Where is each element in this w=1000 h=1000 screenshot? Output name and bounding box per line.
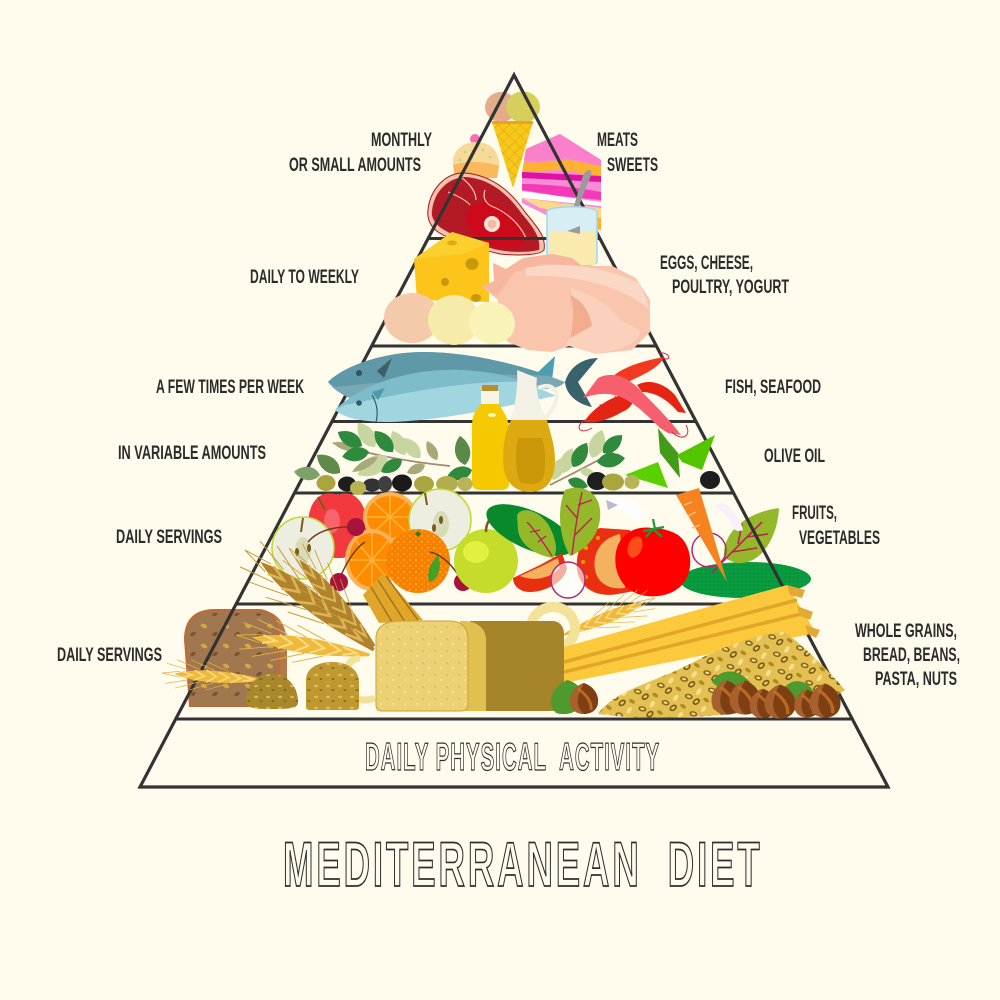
icon: orange slice upper — [363, 492, 417, 542]
icon: chard leaves — [517, 488, 600, 558]
label: in variable amounts: IN VARIABLE AMOUNTS — [118, 443, 266, 464]
label: daily to weekly: DAILY TO WEEKLY — [250, 267, 359, 288]
icon: red apple — [308, 493, 367, 558]
pyramid base text: daily physical activity: DAILY PHYSICAL ACTIVITY — [365, 735, 659, 779]
icon: cake slice — [522, 134, 601, 230]
label: poultry yogurt: POULTRY, YOGURT — [672, 277, 789, 298]
icon: bagel rings — [345, 607, 575, 700]
icon: olive oil jug — [503, 370, 556, 492]
icon: halved apple right — [409, 489, 471, 551]
icon: dry spaghetti bundle — [363, 573, 423, 623]
icon: grain pile — [598, 632, 845, 718]
icon: onion rings — [551, 533, 726, 598]
icon: halved apple left — [272, 517, 334, 579]
food in front of the pyramid lines — [161, 170, 845, 719]
icon: cucumber and chard on the right — [679, 508, 811, 598]
icon: dark cucumber — [479, 494, 581, 566]
icon: cut of red meat — [428, 173, 544, 255]
icon: raw chicken — [482, 254, 650, 354]
icon: ice cream — [485, 92, 540, 188]
icon: tomato wedge — [513, 553, 567, 592]
icon: cherries — [308, 518, 472, 591]
icon: eggs — [384, 293, 519, 348]
label: eggs cheese: EGGS, CHEESE, — [660, 253, 753, 274]
label: olive oil: OLIVE OIL — [764, 446, 825, 467]
label: daily servings grains: DAILY SERVINGS — [57, 645, 162, 666]
icon: tomato slice large — [577, 528, 640, 595]
icon: green apple — [454, 519, 518, 593]
label: monthly: MONTHLY — [371, 130, 432, 151]
icon: red tomato — [615, 519, 690, 596]
label: pasta nuts: PASTA, NUTS — [875, 669, 957, 690]
icon: orange slice lower — [345, 529, 399, 591]
icon: carrot — [676, 488, 727, 582]
icon: cupcake — [453, 134, 499, 178]
label: or small amounts: OR SMALL AMOUNTS — [289, 155, 421, 176]
label: vegetables: VEGETABLES — [799, 528, 880, 549]
title: MEDITERRANEAN DIET — [283, 829, 760, 899]
icon: upper fish — [328, 352, 598, 407]
icon: olives row — [316, 471, 720, 495]
label: sweets: SWEETS — [607, 155, 658, 176]
label: fish seafood: FISH, SEAFOOD — [725, 377, 821, 398]
icon: mushrooms — [606, 497, 743, 531]
icon: olive oil bottle — [472, 385, 509, 490]
labels left column — [57, 130, 432, 666]
label: fruits: FRUITS, — [792, 503, 837, 524]
icon: olive branch right — [547, 427, 627, 492]
icon: bright green leaves — [625, 428, 715, 488]
label: a few times per week: A FEW TIMES PER WEEK — [156, 377, 304, 398]
pyramid outline with tier lines — [140, 75, 888, 787]
icon: yogurt jar — [547, 170, 597, 266]
icon: hazelnuts and leaves — [551, 672, 841, 719]
icon: cheese wedge — [414, 232, 489, 302]
food behind the pyramid lines — [185, 92, 811, 706]
label: meats: MEATS — [597, 130, 638, 151]
icon: wheat stalks — [161, 531, 661, 695]
icon: whole orange — [386, 529, 450, 593]
icon: lasagne sheets — [564, 585, 820, 683]
icon: small seeded loaf — [306, 662, 359, 710]
label: daily servings fruits: DAILY SERVINGS — [116, 527, 222, 548]
icon: small round roll — [246, 674, 298, 709]
icon: olive branch left — [293, 418, 474, 484]
labels right column — [597, 130, 960, 690]
icon: brown bread slice — [185, 610, 287, 706]
icon: lower fish — [335, 370, 560, 422]
icon: bread loaf — [376, 621, 564, 711]
icon: shrimp group — [579, 353, 688, 437]
